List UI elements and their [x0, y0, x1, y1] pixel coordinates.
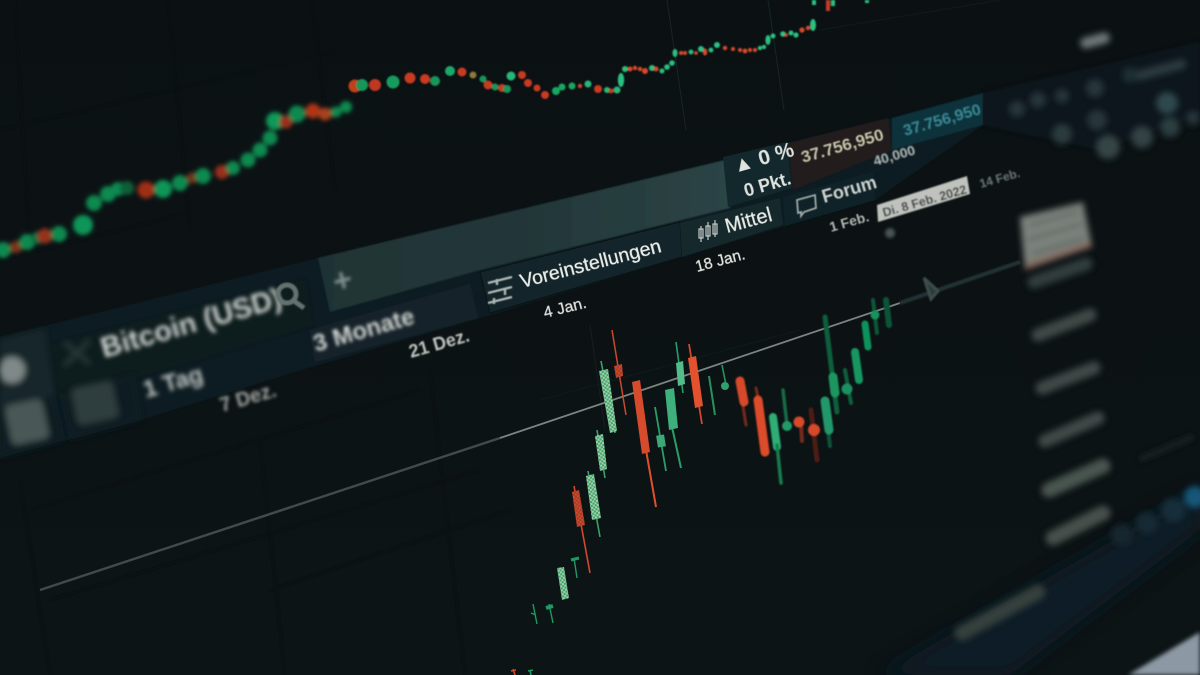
- sliders icon: [488, 277, 512, 304]
- change points: 0 Pkt.: [742, 168, 793, 201]
- left blurred beads: [0, 101, 352, 258]
- bottom blue band: [880, 490, 1200, 675]
- label: 7 Dez: 7 Dez.: [217, 380, 279, 417]
- green checkered bodies: [557, 567, 569, 600]
- price box brown: [788, 118, 892, 190]
- sharp candles: [531, 330, 729, 624]
- main candlestick chart: [511, 300, 889, 675]
- y-axis current price box: [1020, 202, 1092, 270]
- plus icon: +: [329, 260, 356, 300]
- button: three months: [310, 284, 478, 362]
- bottom right bezel: [1128, 632, 1200, 675]
- label: 40,000: 40,000: [871, 142, 917, 169]
- bottom blue icons: [1111, 486, 1200, 546]
- button: presets: [480, 222, 682, 313]
- y-axis tick labels: [1034, 264, 1103, 538]
- label: 3 Monate: 3 Monate: [310, 303, 418, 358]
- bottom clipped candles: [511, 669, 533, 675]
- label: Forum: Forum: [820, 172, 879, 207]
- search field: [50, 280, 312, 400]
- red wicks and bodies: [574, 486, 590, 573]
- label: 1 Feb: 1 Feb.: [827, 208, 871, 235]
- chart grid lines: [0, 0, 510, 675]
- right sharper beads: [618, 0, 869, 87]
- label: Mittel: Mittel: [723, 204, 774, 238]
- upper candlestick chain chart: [0, 0, 869, 258]
- toolbar band: [0, 42, 1200, 458]
- toolbar labels and icons: [97, 101, 1022, 417]
- label: 4 Jan: 4 Jan.: [542, 295, 588, 322]
- label: Voreinstellungen: Voreinstellungen: [518, 235, 664, 293]
- left side buttons: [0, 328, 142, 458]
- label: 14 Feb: 14 Feb.: [978, 166, 1022, 191]
- price trend line: [40, 262, 1020, 590]
- top-right toolbar extension: [983, 42, 1200, 150]
- blurred candles: [740, 300, 889, 483]
- buttons: [310, 93, 983, 362]
- candlestick icon: [699, 220, 717, 242]
- price label brown: 37.756,950: [799, 125, 886, 167]
- change percent: ▲ 0 %: [730, 138, 797, 178]
- label: 1 Tag: 1 Tag: [140, 361, 206, 404]
- crosshair date label: Di. 8 Feb. 2022: [881, 182, 968, 220]
- button: chart type: [680, 198, 783, 257]
- label: 21 Dez: 21 Dez.: [407, 326, 472, 362]
- cursor icon: [924, 278, 938, 299]
- search title: Bitcoin (USD): [97, 282, 286, 365]
- toolbar base: [0, 95, 983, 458]
- price label teal: 37.756,950: [901, 101, 983, 140]
- middle beads: [348, 66, 620, 99]
- change box: [723, 142, 792, 207]
- label: 18 Jan: 18 Jan.: [694, 246, 747, 276]
- bottom blurred label: [962, 592, 1038, 633]
- top-right blurred icons: [1009, 31, 1200, 159]
- faint green axis marker: [1143, 438, 1190, 458]
- hatched settings panel: [318, 160, 730, 312]
- small tick label: [885, 228, 895, 238]
- speech bubble icon: [797, 195, 816, 216]
- button: forum: [783, 172, 875, 226]
- upper chart guide lines: [540, 0, 1000, 430]
- magnifier icon: [278, 285, 304, 308]
- price box teal: [892, 93, 983, 150]
